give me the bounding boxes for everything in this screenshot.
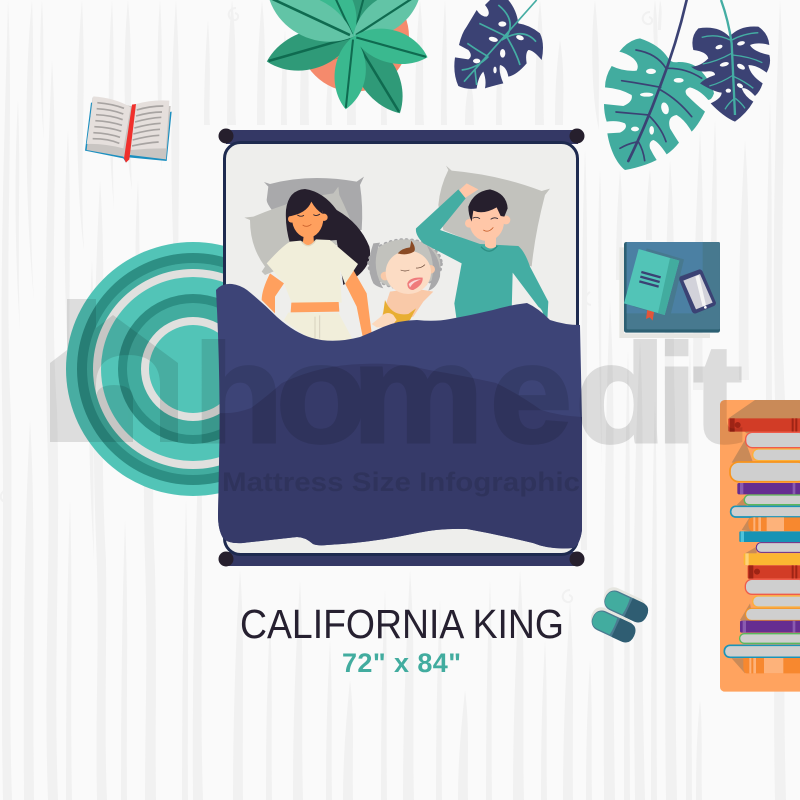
watermark logo bbox=[50, 299, 743, 497]
book bbox=[746, 432, 800, 448]
slipper bbox=[599, 584, 652, 625]
book bbox=[746, 608, 800, 620]
book bbox=[745, 579, 800, 594]
book bbox=[724, 645, 800, 657]
book bbox=[731, 506, 800, 517]
headboard bbox=[226, 130, 578, 144]
sleeping family bbox=[244, 166, 550, 341]
monstera leaf: top right navy bbox=[691, 0, 770, 122]
book bbox=[730, 462, 800, 482]
logo house bbox=[50, 299, 178, 442]
book bbox=[728, 418, 800, 432]
baby bbox=[369, 239, 441, 327]
book bbox=[743, 658, 800, 673]
footboard bbox=[226, 552, 578, 566]
book bbox=[624, 248, 684, 321]
phone bbox=[677, 269, 718, 317]
woman bbox=[244, 177, 372, 341]
watermark word: homedit bbox=[193, 315, 743, 472]
book bbox=[748, 517, 800, 531]
mattress bbox=[224, 142, 578, 554]
book bbox=[753, 596, 800, 607]
table bbox=[619, 247, 710, 338]
book bbox=[748, 565, 800, 579]
book bbox=[740, 634, 800, 643]
bed knobs bbox=[218, 128, 584, 566]
book bbox=[753, 449, 800, 461]
nightstand with book and phone bbox=[619, 242, 720, 338]
book bbox=[737, 483, 800, 494]
rug bbox=[66, 242, 320, 496]
book bbox=[744, 495, 800, 505]
book bbox=[739, 531, 800, 542]
book bbox=[740, 621, 800, 633]
plant: top centre bbox=[260, 0, 432, 123]
wood knots bbox=[1, 8, 652, 602]
man bbox=[416, 166, 550, 320]
title: CALIFORNIA KING bbox=[240, 601, 564, 647]
slipper bbox=[587, 604, 640, 645]
watermark subtitle: Mattress Size Infographic bbox=[222, 467, 580, 497]
book bbox=[756, 543, 800, 552]
monstera leaf: top right teal bbox=[604, 0, 714, 170]
bed bbox=[218, 128, 584, 566]
slippers bbox=[587, 584, 652, 645]
book bbox=[744, 553, 800, 565]
open book bbox=[85, 96, 172, 163]
monstera leaf: top navy bbox=[454, 0, 543, 89]
bookshelf bbox=[720, 400, 800, 692]
blanket bbox=[216, 284, 582, 548]
dimensions: 72" x 84" bbox=[342, 648, 461, 678]
